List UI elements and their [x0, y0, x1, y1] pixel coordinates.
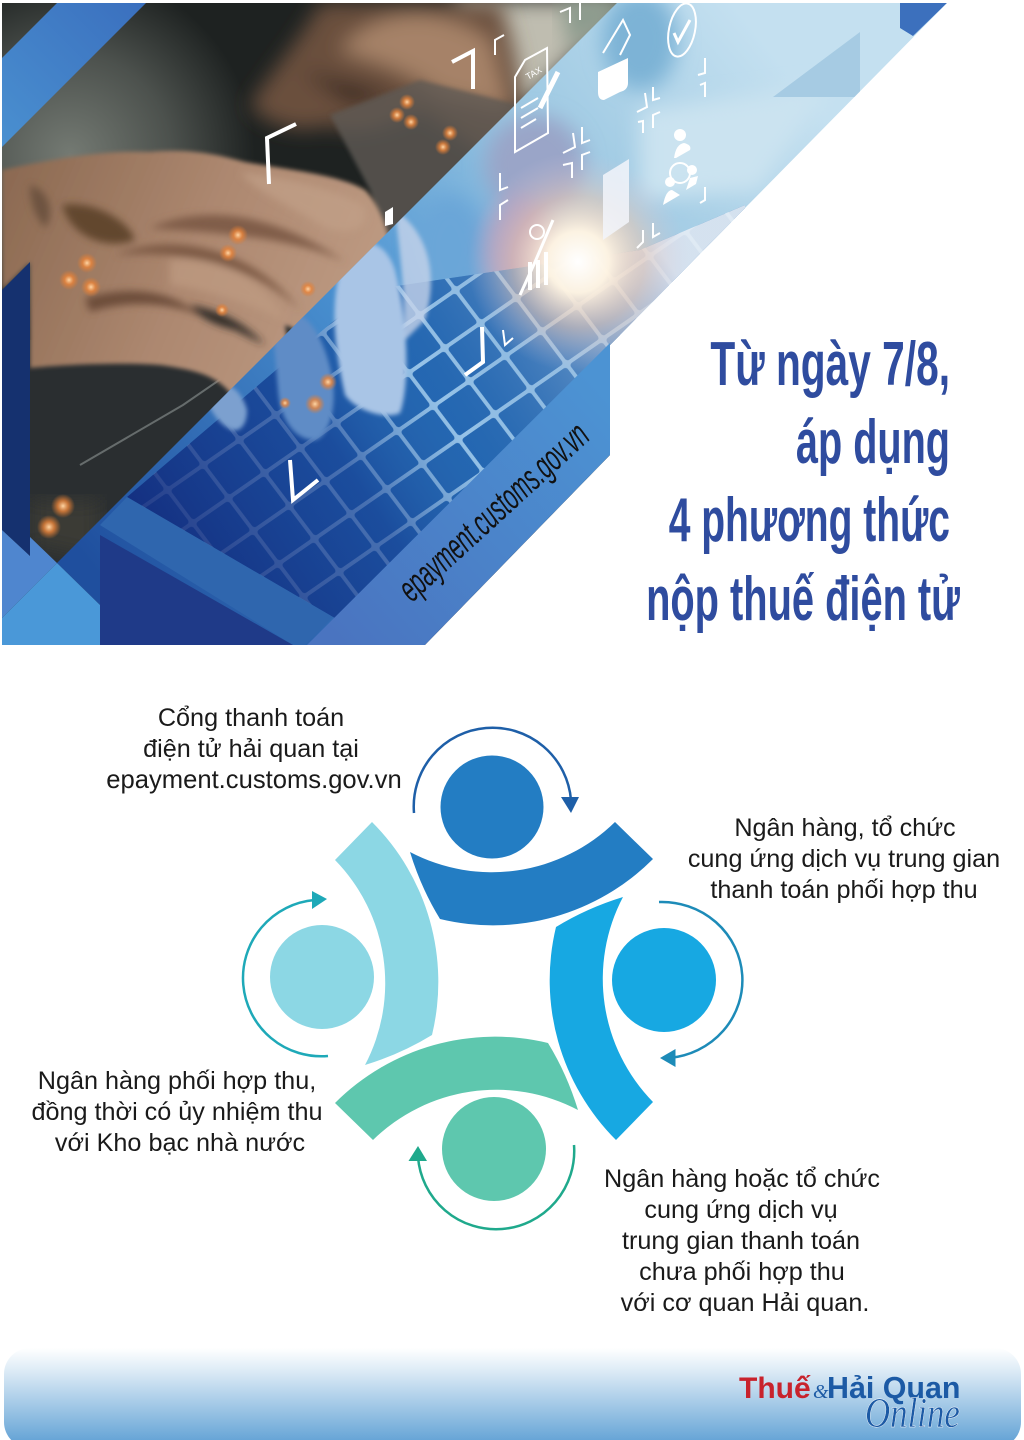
soft laptop and hand shapes behind the icons	[433, 3, 802, 280]
caption: partner banks and intermediaries: cung ứng dịch vụ trung gian	[688, 845, 1000, 873]
icon: form	[603, 159, 629, 240]
caption: partner banks and intermediaries: Ngân hàng, tổ chức	[734, 814, 956, 842]
icon: people and globe	[663, 129, 698, 205]
front hand	[2, 148, 390, 394]
caption: non-partner banks: với cơ quan Hải quan.	[621, 1289, 869, 1317]
step 4: light blue	[243, 822, 438, 1065]
caption: non-partner banks	[604, 1165, 880, 1317]
bottom left blue corner	[2, 530, 57, 618]
icon: tax document	[515, 48, 558, 152]
laptop front edge	[100, 497, 330, 615]
pale background above hands	[445, 3, 617, 104]
logo	[739, 1371, 960, 1437]
bottom blue panel	[307, 343, 610, 645]
caption: non-partner banks: trung gian thanh toán	[622, 1227, 860, 1255]
white tech icons	[267, 1, 705, 500]
title	[646, 331, 960, 634]
title: Từ ngày 7/8,	[710, 331, 950, 399]
keyboard keys	[142, 205, 745, 604]
caption: treasury authorised banks: đồng thời có ủy nhiệm thu	[32, 1098, 322, 1126]
caption: non-partner banks: Ngân hàng hoặc tổ chức	[604, 1165, 880, 1193]
caption: partner banks and intermediaries: thanh toán phối hợp thu	[710, 876, 978, 904]
logo: Thuế	[739, 1372, 811, 1405]
icon: wallet	[598, 20, 630, 100]
orange light sparks	[37, 94, 458, 539]
title: 4 phương thức	[669, 485, 950, 554]
url text on banner: epayment.customs.gov.vn	[390, 415, 597, 609]
knuckle and finger shadows	[30, 172, 366, 345]
logo: Hải Quan	[827, 1371, 960, 1405]
step 3: green	[335, 1037, 578, 1229]
icon: growth chart	[520, 220, 553, 295]
back hand	[250, 3, 521, 170]
top left blue stripe	[2, 3, 146, 147]
blue keyboard overlay	[57, 3, 947, 645]
logo: Online	[865, 1391, 960, 1437]
caption: customs portal: Cổng thanh toán	[158, 704, 344, 732]
step 2: bright blue	[550, 897, 742, 1140]
caption: treasury authorised banks	[32, 1067, 322, 1157]
logo: &	[813, 1381, 829, 1403]
footer band	[4, 1348, 1021, 1440]
left navy stripe	[2, 262, 30, 556]
caption: non-partner banks: cung ứng dịch vụ	[644, 1196, 838, 1224]
caption: treasury authorised banks: Ngân hàng phối hợp thu,	[38, 1067, 316, 1095]
top right accent	[900, 3, 947, 36]
caption: customs portal: epayment.customs.gov.vn	[106, 766, 402, 794]
step 1: dark blue	[410, 728, 653, 925]
caption: treasury authorised banks: với Kho bạc nhà nước	[55, 1129, 305, 1157]
photo banner: hands on keyboard	[0, 0, 1024, 650]
cycle diagram	[243, 728, 742, 1229]
caption: non-partner banks: chưa phối hợp thu	[639, 1258, 845, 1286]
title: áp dụng	[796, 408, 950, 477]
translucent grey pane over back hand	[330, 80, 520, 240]
fingers in blue	[205, 210, 431, 440]
caption: customs portal	[106, 704, 402, 794]
light flare	[474, 164, 672, 366]
caption: partner banks and intermediaries	[688, 814, 1000, 904]
icon: tax document: TAX	[524, 65, 544, 82]
dark laptop body	[30, 327, 292, 562]
icon: check badge	[667, 3, 697, 58]
caption: customs portal: điện tử hải quan tại	[143, 735, 359, 763]
title: nộp thuế điện tử	[646, 565, 960, 634]
